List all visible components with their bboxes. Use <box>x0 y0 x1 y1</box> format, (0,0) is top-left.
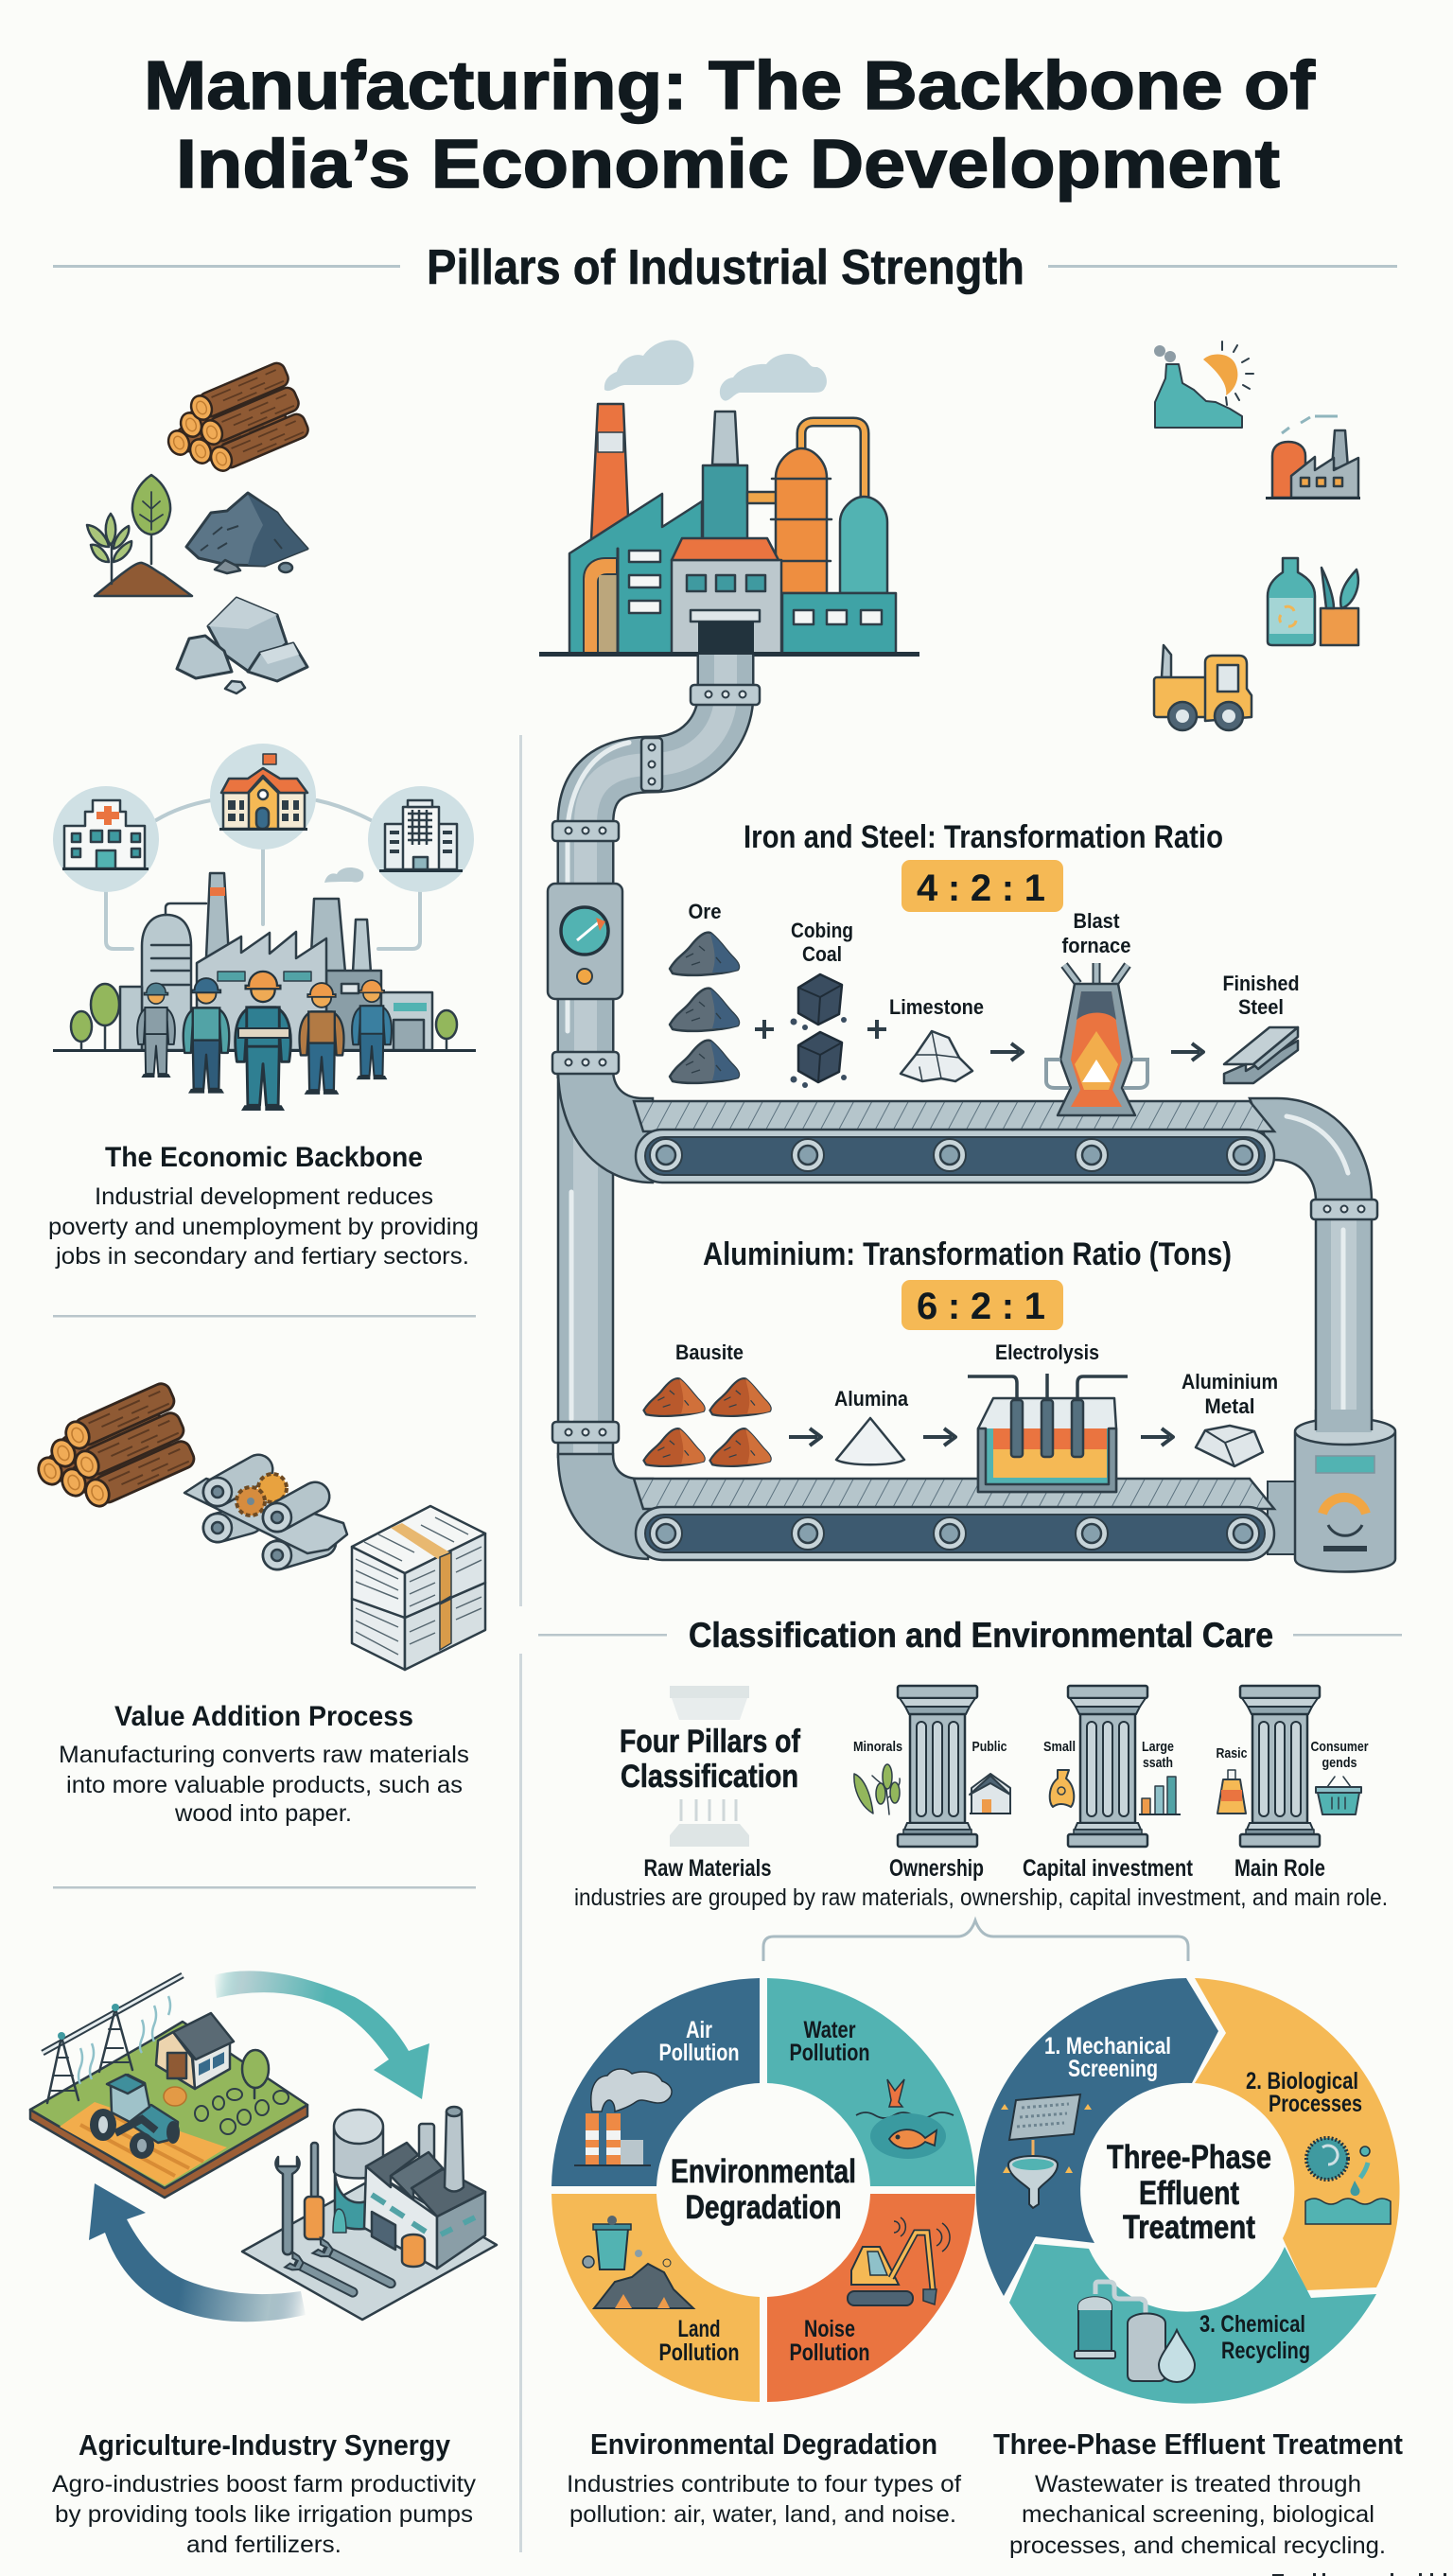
icon: value addition logs <box>34 1381 197 1510</box>
icon: small factory <box>1266 416 1360 499</box>
control machine <box>1295 1410 1395 1572</box>
icon: office circle <box>368 786 474 892</box>
treatment centre label: Three-Phase <box>1107 2139 1271 2176</box>
text block: effluent treatment <box>1009 2471 1386 2559</box>
labels: Cobing <box>791 919 853 942</box>
heading: iron and steel ratio: Iron and Steel: Transformation Ratio <box>744 819 1223 855</box>
icon: bauxite piles <box>643 1378 771 1466</box>
teal main building <box>569 494 702 655</box>
icon: factory and workers <box>53 867 476 1111</box>
text block: agriculture-industry synergy <box>52 2471 477 2558</box>
faded pillar: raw materials <box>670 1686 749 1847</box>
icon: finished steel <box>1224 1027 1298 1083</box>
connector lines <box>106 800 420 949</box>
text block: effluent treatment: Wastewater is treated through <box>1035 2471 1361 2497</box>
pillar column labels: Ownership <box>889 1855 984 1882</box>
centre building <box>672 560 781 655</box>
badge: 4:2:1: 4 : 2 : 1 <box>917 867 1045 909</box>
phase 3: chemical recycling: 3. Chemical <box>1199 2311 1305 2338</box>
phase 2: biological processes: 2. Biological <box>1246 2068 1358 2094</box>
icon: right side mini icons <box>1154 342 1360 730</box>
pipeline and conveyors <box>548 655 1395 1572</box>
heading: environmental degradation: Environmental Degradation <box>590 2427 937 2461</box>
icon: leaves <box>854 1764 900 1814</box>
segment: air pollution: Air <box>686 2017 712 2043</box>
donut centre label <box>671 2153 856 2226</box>
chart: three-phase effluent treatment <box>976 1978 1400 2404</box>
bracket <box>763 1920 1188 1961</box>
pillar small labels: Consumer <box>1311 1739 1369 1755</box>
badge: 4:2:1 <box>902 860 1063 912</box>
labels: Ore <box>689 900 721 923</box>
icon: aluminium ingot <box>1196 1426 1263 1466</box>
pillar small labels: Public <box>972 1739 1007 1755</box>
icon: blast furnace <box>1046 963 1147 1115</box>
arrow: to electrolysis <box>923 1428 955 1446</box>
arrow: to alumina <box>789 1428 821 1446</box>
heading: classification and environmental care: Classification and Environmental Care <box>689 1616 1273 1655</box>
icon: house <box>970 1774 1011 1814</box>
icon: ore piles <box>670 933 739 1083</box>
icon: yellow truck <box>1154 645 1252 730</box>
labels: Steel <box>1238 995 1284 1019</box>
icon: mountain and sun <box>1154 342 1253 428</box>
icon: excavator <box>848 2217 950 2305</box>
icon: coking coal cubes <box>791 974 847 1088</box>
treatment centre label: Treatment <box>1123 2209 1255 2246</box>
labels: Aluminium <box>1182 1370 1278 1393</box>
labels: fornace <box>1061 934 1131 957</box>
conveyor 1 <box>634 1101 1274 1183</box>
icon: stacked logs <box>165 360 310 474</box>
pillar small labels: Rasic <box>1217 1745 1247 1761</box>
labels: Electrolysis <box>995 1341 1099 1364</box>
heading: value addition process: Value Addition Process <box>114 1701 413 1732</box>
pillar small labels: gends <box>1322 1755 1357 1771</box>
segment: noise pollution: Noise <box>804 2316 855 2342</box>
text block: agriculture-industry synergy: Agro-industries boost farm productivity <box>52 2471 477 2497</box>
panel: aluminium <box>643 1236 1278 1492</box>
pillar small labels <box>853 1739 1369 1771</box>
pillar small labels: Minorals <box>853 1739 902 1755</box>
conveyor 2 <box>634 1479 1274 1560</box>
icon: smoke clouds <box>604 341 827 401</box>
icon: raw materials group <box>87 360 310 693</box>
title: India’s Economic Development <box>176 127 1280 202</box>
segment: air pollution: Pollution <box>658 2040 740 2066</box>
orange pipe <box>801 422 865 498</box>
text block: environmental degradation: Industries contribute to four types of <box>567 2471 961 2497</box>
segment: water pollution: Pollution <box>789 2040 870 2066</box>
pillar small labels: Small <box>1043 1739 1076 1755</box>
icon: isometric factory and tools <box>242 2107 497 2320</box>
phase 1: mechanical screening: 1. Mechanical <box>1044 2033 1171 2059</box>
teal chimney <box>712 412 738 464</box>
panel: agriculture-industry synergy <box>30 1971 497 2558</box>
icon: school circle <box>210 744 316 850</box>
icon: tube <box>1217 1770 1246 1814</box>
treatment centre label <box>1107 2139 1271 2246</box>
icon: chemical tanks <box>1075 2282 1195 2382</box>
icon: hospital circle <box>53 786 159 892</box>
orange tank <box>776 448 827 593</box>
divider <box>53 1886 476 1888</box>
donut centre label: Environmental <box>671 2153 856 2190</box>
title <box>144 48 1316 202</box>
donut centre label: Degradation <box>685 2189 842 2226</box>
segment: land pollution <box>551 2194 760 2402</box>
labels: Blast <box>1073 909 1120 933</box>
text block: value addition: into more valuable products, such as <box>66 1772 463 1798</box>
text block: economic backbone <box>48 1183 479 1270</box>
badge: 6:2:1 <box>902 1280 1063 1330</box>
pillar column labels: Main Role <box>1234 1855 1325 1882</box>
phase 3: chemical recycling <box>1009 2244 1376 2404</box>
labels: Coal <box>802 942 842 966</box>
segment: noise pollution <box>767 2194 975 2402</box>
icon: rollers and gears <box>184 1469 347 1569</box>
vertical divider <box>519 735 522 2552</box>
segment: land pollution: Land <box>677 2316 721 2342</box>
labels <box>675 1341 1278 1418</box>
plus signs <box>755 1020 886 1039</box>
text block: effluent treatment: mechanical screening, biological <box>1022 2501 1374 2528</box>
icon: bin and waste pile <box>583 2216 693 2308</box>
arrow: farm to industry <box>214 1971 429 2099</box>
segment: water pollution <box>767 1978 975 2186</box>
chart: environmental degradation donut <box>551 1978 975 2402</box>
panel: effluent treatment text <box>993 2427 1403 2559</box>
labels: Limestone <box>889 995 984 1019</box>
segment: land pollution: Pollution <box>658 2339 740 2366</box>
text block: value addition: Manufacturing converts raw materials <box>59 1742 469 1768</box>
text block: effluent treatment: processes, and chemical recycling. <box>1009 2532 1386 2559</box>
segment: air pollution <box>551 1978 760 2186</box>
heading: four pillars <box>620 1724 801 1795</box>
arrow: to furnace <box>990 1043 1023 1060</box>
pillar column labels: Raw Materials <box>643 1855 772 1882</box>
heading: four pillars: Classification <box>621 1759 798 1795</box>
panel: value addition <box>34 1381 485 1827</box>
icon: paper stacks <box>352 1506 485 1670</box>
low teal building <box>782 593 896 655</box>
icon: money bag <box>1050 1770 1074 1807</box>
heading: pillars of industrial strength: Pillars of Industrial Strength <box>427 240 1024 295</box>
text block: economic backbone: Industrial development reduces <box>95 1183 433 1210</box>
pillar column labels: Capital investment <box>1023 1855 1194 1882</box>
labels: Finished <box>1222 972 1300 995</box>
gauge on pipe <box>548 884 622 999</box>
phase 2: biological processes: Processes <box>1269 2091 1362 2117</box>
labels <box>689 900 1300 1019</box>
icon: shopping basket <box>1316 1777 1361 1814</box>
badge: 6:2:1: 6 : 2 : 1 <box>917 1286 1045 1327</box>
arrow: industry to farm <box>89 2183 306 2322</box>
arrow: to steel <box>1171 1043 1203 1060</box>
icon: rocks <box>177 598 307 693</box>
panel: iron and steel <box>670 819 1300 1115</box>
text block: classification summary: industries are grouped by raw materials, ownership, capital investment, and main role. <box>574 1884 1388 1911</box>
icon: water and fish <box>856 2079 954 2159</box>
pipe joints <box>552 685 1377 1443</box>
divider <box>53 1315 476 1317</box>
heading: agriculture-industry synergy: Agriculture-Industry Synergy <box>79 2428 451 2462</box>
pillar column labels <box>643 1855 1325 1882</box>
panel: the economic backbone <box>48 744 479 1270</box>
text block: value addition: wood into paper. <box>174 1800 352 1827</box>
icon: electrolysis cell <box>968 1374 1128 1492</box>
panel: environmental degradation text <box>567 2427 961 2528</box>
icon: screen and funnel <box>1001 2094 1092 2208</box>
segment: noise pollution: Pollution <box>789 2339 870 2366</box>
text block: economic backbone: poverty and unemployment by providing <box>48 1214 479 1240</box>
icon: limestone <box>901 1031 972 1081</box>
arrow: to metal <box>1141 1428 1173 1446</box>
pillar small labels: Large <box>1142 1739 1174 1755</box>
icon: air smoke <box>574 2069 672 2166</box>
pipe: factory to conveyor <box>558 655 1372 1559</box>
heading: the economic backbone: The Economic Backbone <box>105 1142 423 1173</box>
icon: coal pile <box>186 493 307 573</box>
text block: environmental degradation: pollution: air, water, land, and noise. <box>569 2501 956 2528</box>
labels: Alumina <box>834 1387 909 1411</box>
heading: three-phase effluent treatment: Three-Phase Effluent Treatment <box>993 2427 1403 2461</box>
icon: bottle and plant pot <box>1268 558 1358 645</box>
icon: microbe and water <box>1305 2138 1391 2224</box>
panel: four pillars of classification <box>574 1686 1388 1911</box>
text block: environmental degradation <box>567 2471 961 2528</box>
heading: aluminium ratio: Aluminium: Transformation Ratio (Tons) <box>703 1236 1232 1272</box>
text block: value addition <box>59 1742 469 1827</box>
treatment centre label: Effluent <box>1139 2175 1239 2212</box>
phase 1: mechanical screening: Screening <box>1068 2056 1158 2082</box>
icon: small bar chart <box>1139 1777 1181 1815</box>
icon: alumina cone <box>836 1418 904 1464</box>
heading: four pillars: Four Pillars of <box>620 1724 801 1760</box>
pillar small labels: ssath <box>1143 1755 1173 1771</box>
phase 3: chemical recycling: Recycling <box>1221 2338 1310 2364</box>
segment: water pollution: Water <box>804 2017 856 2043</box>
text block: economic backbone: jobs in secondary and fertiary sectors. <box>55 1243 469 1270</box>
text block: agriculture-industry synergy: and fertilizers. <box>186 2532 341 2558</box>
text block: agriculture-industry synergy: by providing tools like irrigation pumps <box>55 2501 473 2528</box>
labels: Metal <box>1205 1394 1254 1418</box>
phase 2: biological processes <box>1195 1978 1400 2290</box>
phase 1: mechanical screening <box>976 1978 1218 2296</box>
icon: central factory <box>539 341 919 657</box>
pillars <box>898 1686 1320 1847</box>
icon: isometric farm <box>30 1975 307 2198</box>
factory base line <box>539 652 919 657</box>
heading: pillars of industrial strength <box>53 240 1397 295</box>
title: Manufacturing: The Backbone of <box>144 48 1316 124</box>
teal tank <box>840 497 887 593</box>
orange chimney <box>591 404 629 539</box>
labels: Bausite <box>675 1341 744 1364</box>
icon: plants on soil <box>87 475 192 596</box>
